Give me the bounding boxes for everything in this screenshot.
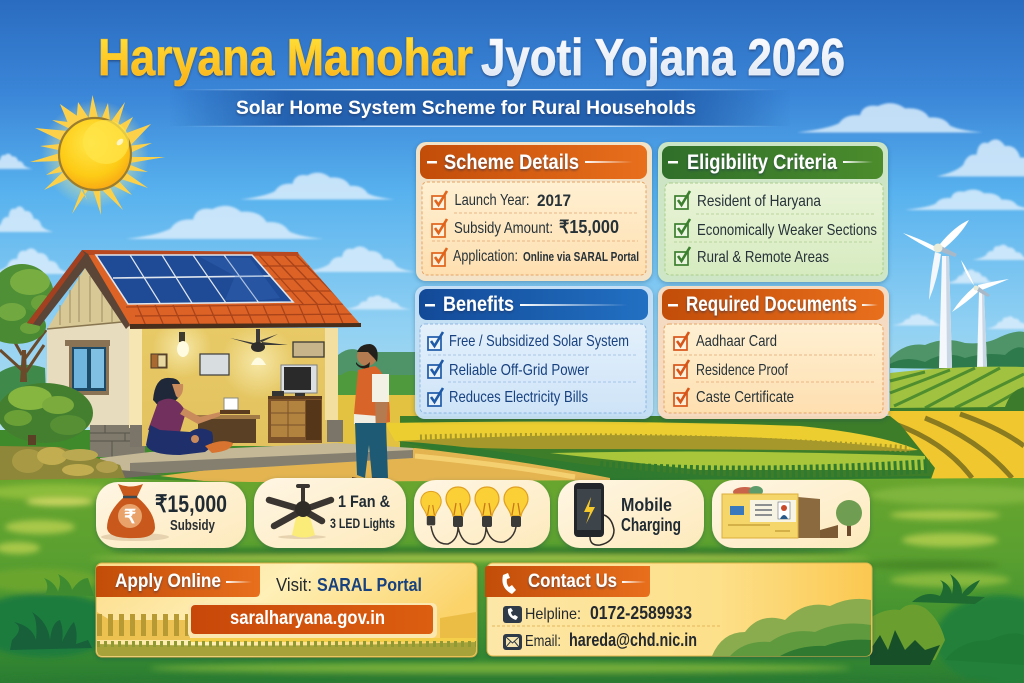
benefits list: Free / Subsidized Solar System [449, 333, 629, 350]
eligibility header [662, 146, 883, 179]
subtitle banner: Solar Home System Scheme for Rural Households [236, 98, 696, 119]
benefits header [419, 289, 648, 320]
clouds [0, 103, 1024, 363]
subtitle banner [170, 89, 790, 127]
scheme details list: ₹15,000 [559, 217, 619, 237]
scheme details list: 2017 [537, 191, 571, 210]
decorative wheat field [97, 612, 476, 656]
porch steps [100, 443, 413, 478]
feature pill: fan and LED lights: 1 Fan & [338, 492, 390, 511]
website button: saralharyana.gov.in [230, 608, 385, 629]
icon: charging phone [574, 483, 614, 545]
website button [188, 603, 437, 638]
bush and rocks [0, 383, 125, 480]
feature pill: mobile charging: Charging [621, 515, 681, 535]
scheme details list: Subsidy Amount: [454, 220, 553, 237]
panel: apply online [96, 563, 477, 657]
helpline [503, 603, 692, 623]
feature pill: mobile charging [558, 480, 704, 548]
documents list: Residence Proof [696, 362, 788, 379]
contact us header [485, 566, 650, 597]
woman sitting [146, 378, 233, 455]
email [503, 630, 697, 650]
right curved crop rows [888, 411, 1024, 480]
helpline: 0172-2589933 [590, 603, 692, 623]
solar panels [96, 255, 293, 304]
sun [30, 95, 165, 215]
foreground grass [0, 472, 1024, 683]
scheme details header [420, 145, 647, 179]
dark hedge behind the panels [400, 416, 935, 482]
ceiling bulb [177, 332, 189, 357]
eligibility header: Eligibility Criteria [687, 151, 837, 174]
grass patches [0, 484, 1024, 683]
feature pill: fan and LED lights: 3 LED Lights [330, 515, 395, 531]
ceiling fan with lamp [230, 329, 288, 365]
title: Haryana Manohar [98, 29, 473, 87]
house wall [47, 270, 130, 427]
icon: ID card with building and tree [722, 486, 862, 538]
television [272, 365, 317, 396]
distant tree line [338, 332, 1024, 400]
email: hareda@chd.nic.in [569, 630, 697, 650]
portal label: SARAL Portal [317, 575, 422, 595]
dirt path [160, 448, 610, 484]
helpline: Helpline: [525, 606, 581, 623]
feature pill: mobile charging: Mobile [621, 495, 672, 515]
window [65, 340, 110, 395]
man standing [352, 344, 390, 481]
pillars [129, 328, 343, 447]
golden fields [160, 375, 1024, 484]
feature pill: fan and LED lights [254, 478, 406, 548]
scheme details list: Launch Year: [454, 192, 530, 209]
documents list: Caste Certificate [696, 389, 794, 406]
roof [27, 250, 361, 329]
scheme details list [422, 182, 646, 275]
contact us header: Contact Us [528, 571, 617, 592]
house [27, 250, 413, 478]
feature pill: LED bulbs [414, 480, 550, 548]
feature pill: subsidy: Subsidy [170, 517, 215, 534]
title: Jyoti Yojana 2026 [481, 29, 845, 87]
benefits list: Reduces Electricity Bills [449, 389, 588, 406]
panel: scheme details [416, 142, 652, 281]
benefits list: Reliable Off-Grid Power [449, 362, 590, 379]
portal label [276, 575, 422, 595]
eligibility list: Economically Weaker Sections [697, 222, 877, 239]
bush right [870, 604, 945, 660]
feature pill: subsidy: ₹15,000 [155, 491, 227, 518]
scheme details list: Online via SARAL Portal [523, 249, 639, 264]
dark green crop row [398, 441, 930, 484]
apply online header [96, 566, 260, 597]
wall pictures [151, 342, 324, 375]
benefits header: Benefits [443, 293, 514, 316]
left trees [0, 264, 54, 420]
icon: ceiling fan [269, 486, 331, 539]
icon: string of bulbs [421, 487, 528, 544]
eligibility list: Rural & Remote Areas [697, 249, 829, 266]
documents header [662, 289, 884, 320]
wind turbines [903, 220, 1009, 368]
stone base [90, 425, 145, 457]
feature pill: application card and office [712, 480, 870, 548]
yellow-green band [550, 452, 925, 470]
panel: contact us [485, 563, 872, 656]
title [98, 29, 845, 87]
scheme details header: Scheme Details [444, 151, 579, 174]
grass tufts left [10, 612, 92, 650]
portal label: Visit: [276, 575, 312, 595]
panel: required documents [658, 286, 889, 419]
feature pill: subsidy [96, 482, 246, 548]
benefits list [420, 324, 646, 413]
golden rice band [385, 422, 918, 450]
panel: benefits [415, 286, 653, 419]
panel: eligibility criteria [658, 142, 888, 282]
green striped hill [890, 367, 1024, 411]
icon: money bag [101, 484, 169, 541]
porch interior [130, 328, 338, 446]
icon: phone handset [502, 573, 516, 594]
eligibility list: Resident of Haryana [697, 193, 821, 210]
icon: money bag: ₹ [124, 507, 136, 528]
wooden dresser [268, 396, 322, 443]
decorative bushes [712, 599, 871, 656]
scheme details list: Application: [453, 248, 518, 265]
sky background [0, 0, 1024, 430]
grass tufts right [912, 574, 985, 604]
documents list [664, 324, 883, 413]
gable siding [47, 268, 122, 329]
email: Email: [525, 633, 561, 650]
eligibility list [665, 183, 883, 275]
documents list: Aadhaar Card [696, 333, 777, 350]
low table with laptop [190, 398, 260, 443]
documents header: Required Documents [686, 293, 857, 316]
apply online header: Apply Online [115, 571, 221, 592]
